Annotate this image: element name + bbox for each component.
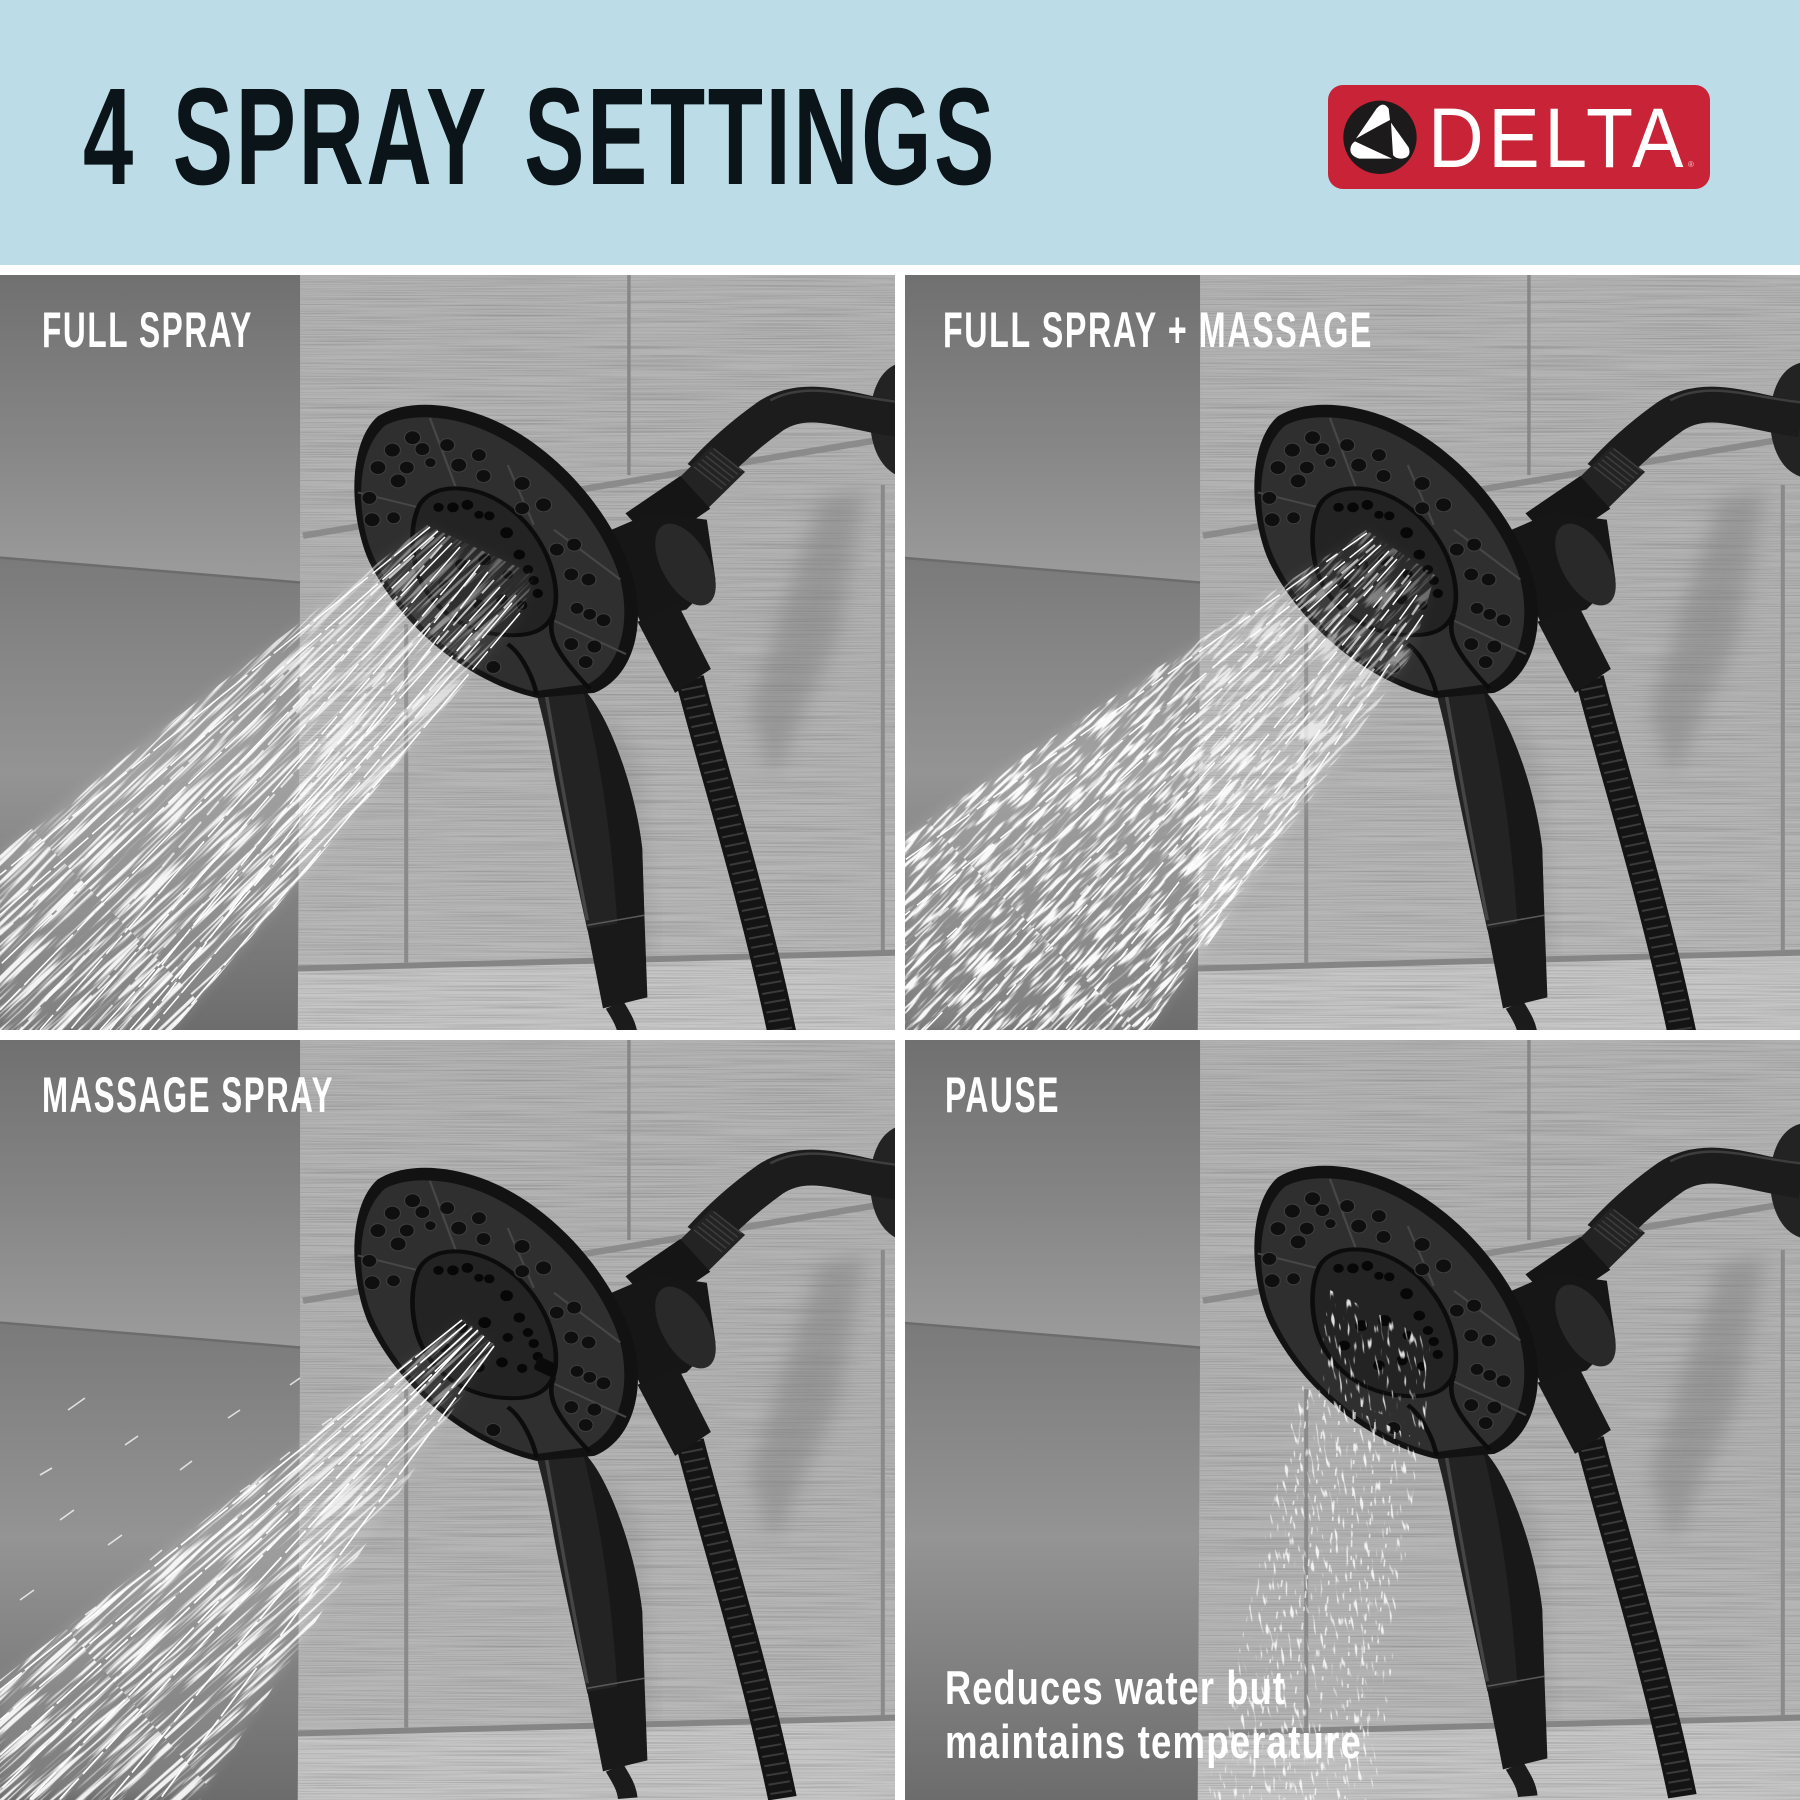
note text: maintains temperature — [945, 1715, 1362, 1768]
logo: Delta — [1328, 85, 1710, 189]
title: 4 SPRAY SETTINGS — [83, 60, 997, 214]
registered mark: ® — [1688, 160, 1694, 169]
droplets — [20, 1378, 332, 1615]
water droplets — [1205, 1290, 1430, 1800]
water spray — [0, 525, 535, 1030]
shower head — [1254, 1124, 1800, 1796]
shower head — [354, 1126, 901, 1798]
icon: Delta triangle mark — [1343, 101, 1417, 174]
label: FULL SPRAY + MASSAGE — [943, 302, 1373, 358]
water spray — [905, 530, 1435, 1030]
panel: full spray — [0, 275, 901, 1035]
water spray — [0, 1318, 495, 1800]
label: PAUSE — [945, 1067, 1060, 1123]
panel: massage spray — [0, 1040, 901, 1800]
icon: spray selector nub — [533, 1356, 559, 1378]
header band — [0, 0, 1800, 265]
wall background — [900, 275, 1800, 1035]
panel: pause — [900, 1040, 1800, 1800]
wall background — [0, 1040, 901, 1800]
shower head — [354, 363, 901, 1035]
wall background — [900, 1040, 1800, 1800]
shower head — [1254, 363, 1800, 1035]
note text: Reduces water but — [945, 1661, 1286, 1714]
panel: full spray + massage — [900, 275, 1800, 1035]
wall background — [0, 275, 901, 1035]
wordmark: DELTA — [1428, 91, 1688, 185]
label: MASSAGE SPRAY — [42, 1067, 334, 1123]
note text — [945, 1661, 1362, 1768]
label: FULL SPRAY — [42, 302, 253, 358]
